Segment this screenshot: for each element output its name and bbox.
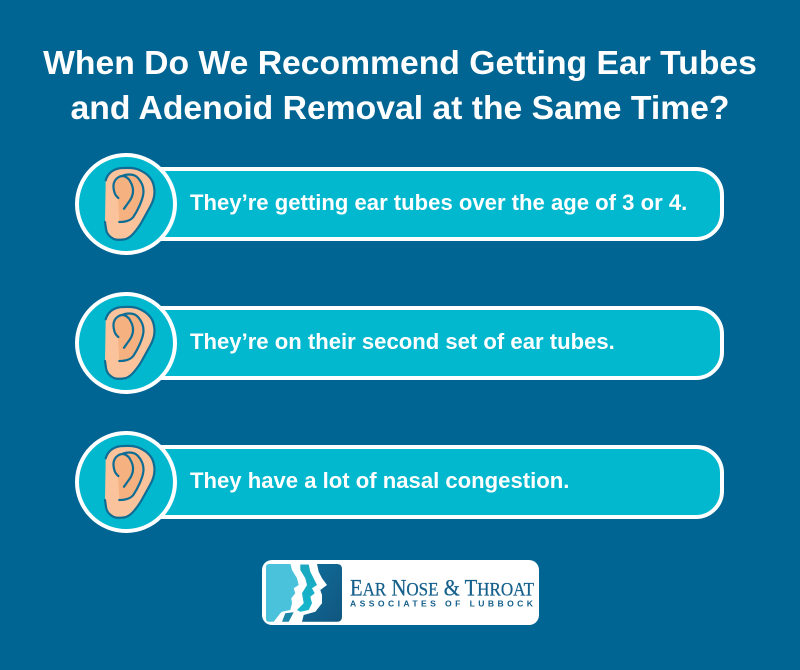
item text: They’re getting ear tubes over the age of 3 or 4. xyxy=(190,190,687,215)
logo wordmark: ASSOCIATES OF LUBBOCK xyxy=(350,598,534,608)
title xyxy=(43,44,757,127)
title: and Adenoid Removal at the Same Time? xyxy=(71,89,729,127)
pill background xyxy=(124,445,724,519)
item 2: second set of ear tubes xyxy=(75,292,724,394)
title: When Do We Recommend Getting Ear Tubes xyxy=(43,44,757,82)
logo: Ear Nose & Throat Associates of Lubbock xyxy=(262,560,539,625)
icon: ear in circle xyxy=(75,292,177,394)
item text: They have a lot of nasal congestion. xyxy=(190,468,569,493)
logo mark: three face profiles xyxy=(266,564,342,622)
icon: ear in circle xyxy=(75,431,177,533)
item 1: ear tubes over age 3 or 4 xyxy=(75,153,724,255)
pill background xyxy=(124,306,724,380)
icon: ear in circle xyxy=(75,153,177,255)
logo background xyxy=(262,560,539,625)
pill background xyxy=(124,167,724,241)
item text: They’re on their second set of ear tubes. xyxy=(190,329,615,354)
item 3: nasal congestion xyxy=(75,431,724,533)
logo wordmark: EAR NOSE & THROAT xyxy=(350,576,534,601)
